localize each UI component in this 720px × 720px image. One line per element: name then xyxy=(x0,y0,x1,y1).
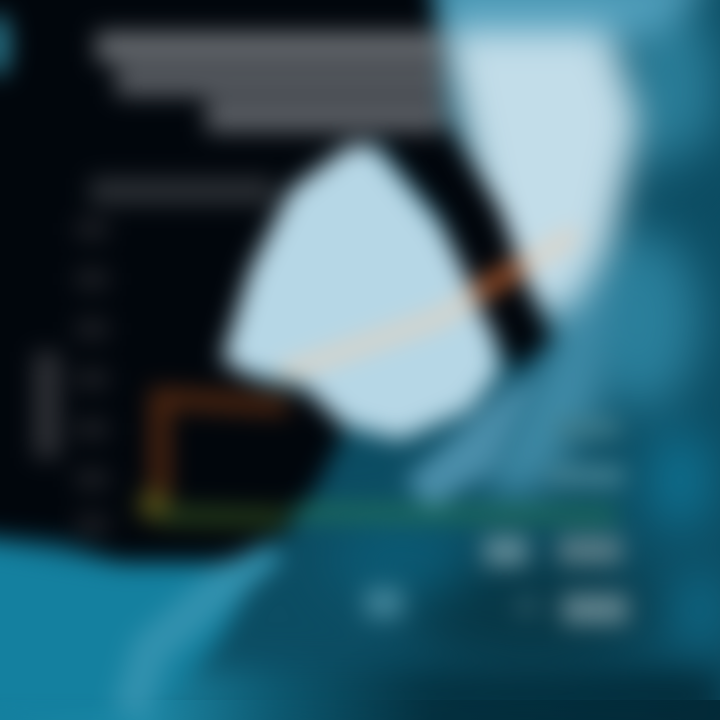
bottom water band xyxy=(0,670,720,720)
water streak, lower left xyxy=(130,545,270,715)
corner highlight, upper left xyxy=(0,13,10,77)
right data labels xyxy=(365,420,628,624)
subtitle xyxy=(90,178,274,204)
bottom left water xyxy=(0,525,285,720)
green series xyxy=(165,515,280,518)
y axis title xyxy=(34,352,60,458)
orange series on dark xyxy=(160,398,280,490)
sky highlight, upper right xyxy=(430,0,715,500)
dark silhouette panel xyxy=(0,0,552,560)
bottom edge underlay xyxy=(0,700,720,720)
background blobs xyxy=(330,0,718,665)
orange series on light xyxy=(285,236,572,372)
title text block xyxy=(96,32,444,132)
y axis tick labels xyxy=(76,220,108,534)
sky highlight, central wedge xyxy=(215,130,500,440)
line chart xyxy=(152,236,610,518)
orange series crossing dark strip xyxy=(482,270,515,290)
water streak below wedge xyxy=(405,375,535,510)
